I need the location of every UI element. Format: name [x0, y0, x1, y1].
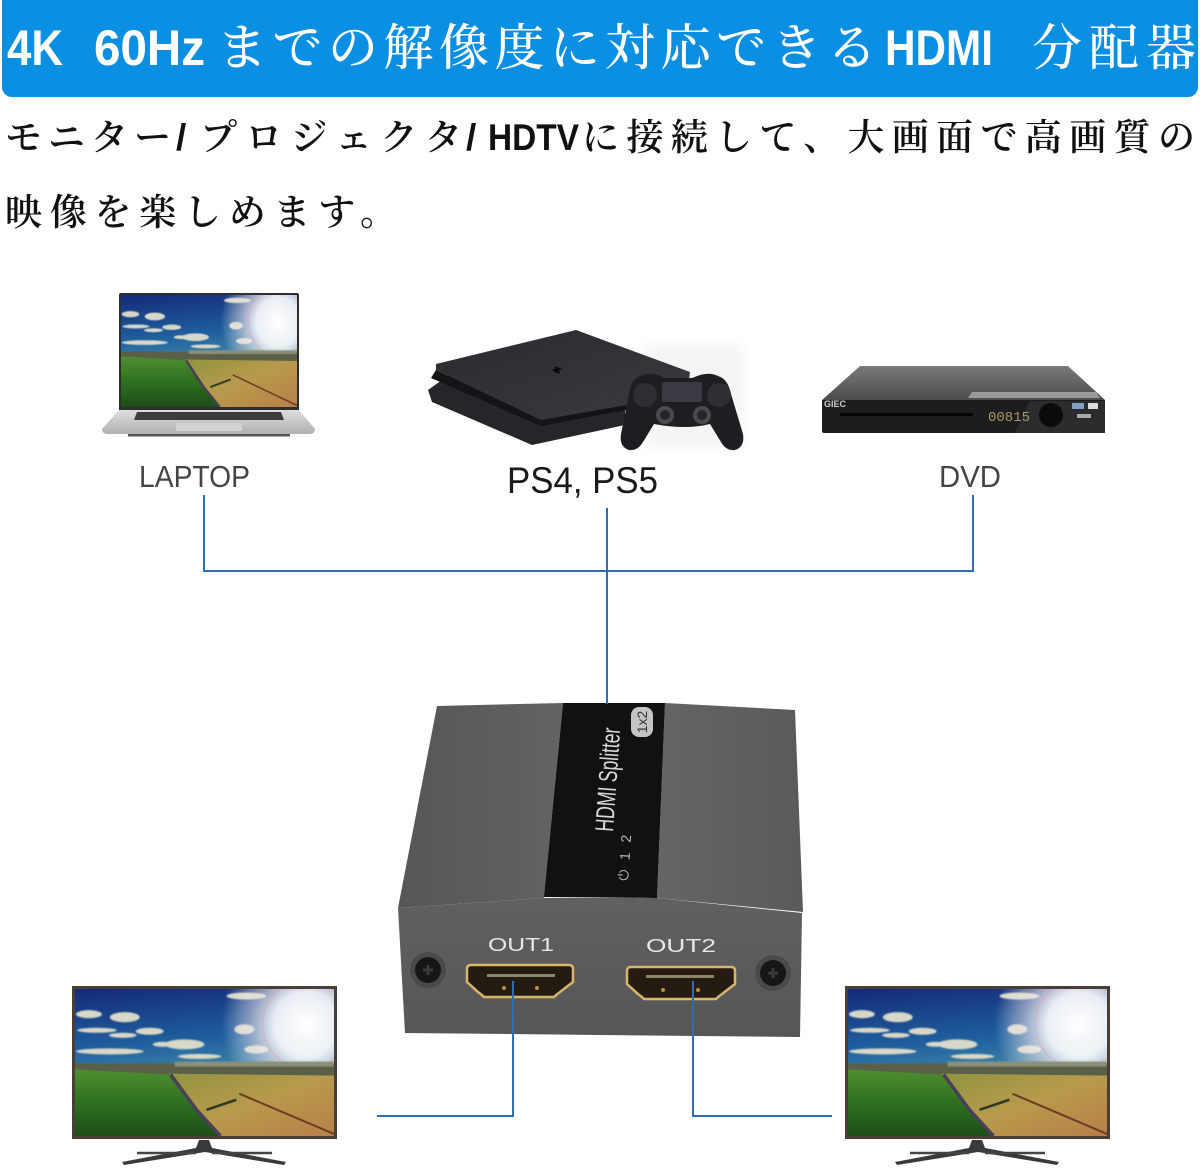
title: 60Hz	[94, 20, 205, 76]
subtitle text: に接続して、大画面で高画質の	[582, 107, 1195, 161]
badge 1x2	[631, 707, 653, 737]
subtitle text: 映像を楽しめます。	[5, 182, 397, 236]
subtitle text: /	[466, 117, 476, 158]
HDMI port 1	[467, 965, 573, 997]
label: laptop: LAPTOP	[139, 459, 250, 494]
screw right	[755, 955, 791, 991]
subtitle text: /	[176, 117, 186, 158]
DVD display: 00815	[988, 410, 1030, 426]
icon: PS4 console and controller	[428, 330, 743, 450]
OUT1 label: OUT1	[488, 935, 554, 955]
title: 4K	[7, 20, 63, 76]
icon: TV right	[845, 980, 1123, 1165]
HDMI splitter device	[398, 700, 803, 1037]
icon: TV left	[72, 980, 350, 1165]
subtitle text: HDTV	[488, 117, 579, 158]
badge 1x2: 1x2	[634, 711, 650, 733]
OUT2 label: OUT2	[646, 936, 716, 956]
icon: laptop	[102, 288, 315, 436]
subtitle text: プロジェクタ	[200, 107, 462, 161]
screw left	[410, 952, 446, 988]
subtitle text	[5, 107, 1195, 236]
splitter top face	[398, 700, 803, 912]
product name: HDMI Splitter	[589, 726, 626, 832]
connection lines: sources	[204, 495, 973, 702]
header banner	[2, 0, 1198, 97]
icon: game controller	[621, 374, 743, 450]
DVD brand: GIEC	[824, 399, 847, 409]
subtitle text: モニター	[5, 107, 171, 161]
title	[7, 8, 1196, 80]
title: までの解像度に対応できる	[217, 8, 877, 80]
splitter front face	[398, 898, 802, 1037]
title: 分配器	[1032, 8, 1196, 80]
icon: DVD player	[822, 366, 1105, 433]
title: HDMI	[885, 20, 993, 76]
connection lines: outputs	[377, 981, 832, 1116]
LED labels: ⏻ 1 2	[615, 834, 634, 881]
label: DVD: DVD	[939, 459, 1001, 494]
label: PS4, PS5: PS4, PS5	[507, 460, 658, 501]
HDMI port 2	[627, 967, 735, 999]
